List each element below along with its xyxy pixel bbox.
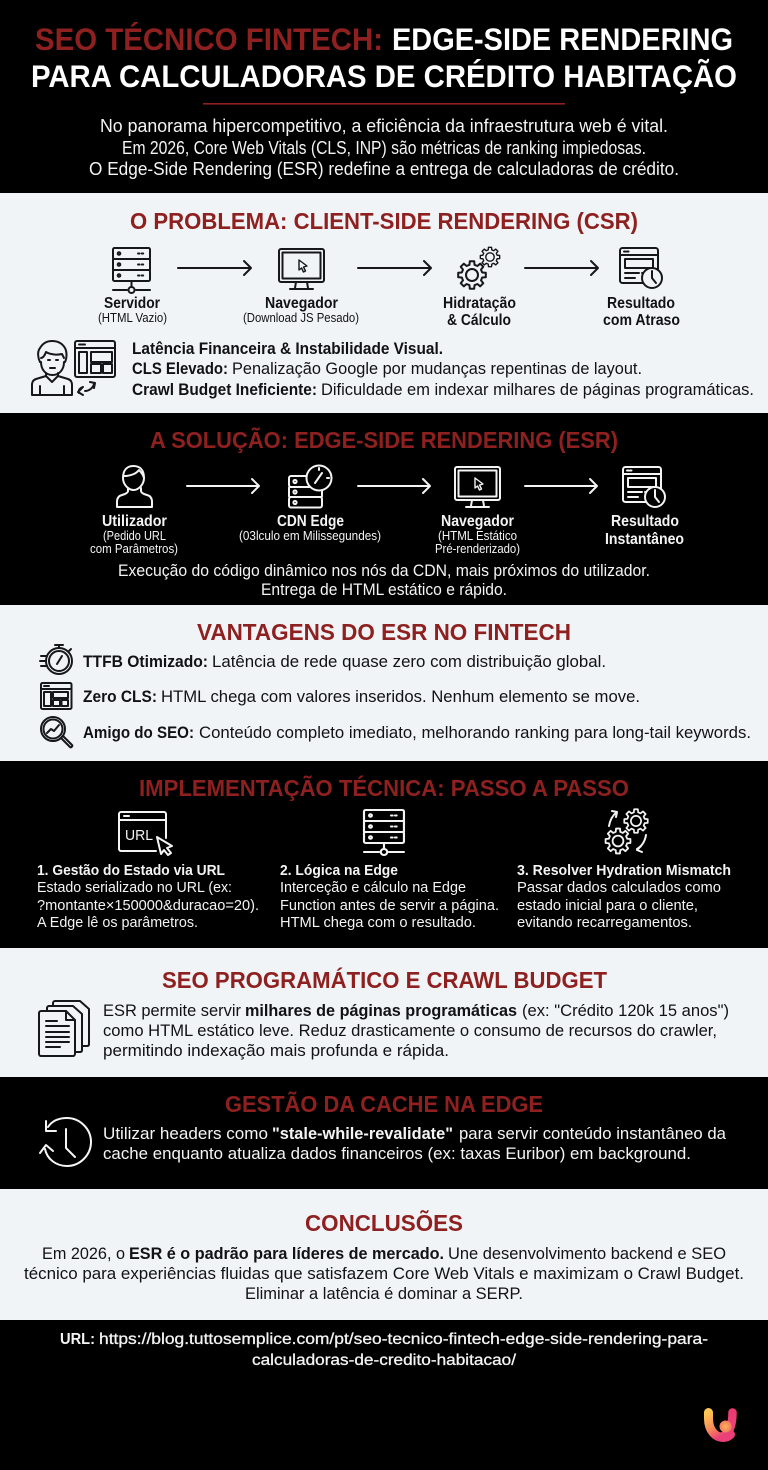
step labels: & Cálculo — [447, 312, 511, 329]
conclusion text: ESR é o padrão para líderes de mercado. — [129, 1244, 444, 1263]
step labels: Navegador — [441, 513, 514, 530]
step labels — [90, 513, 684, 556]
heading: vantagens: VANTAGENS DO ESR NO FINTECH — [197, 619, 571, 645]
step labels: com Parâmetros) — [90, 542, 178, 556]
cache text: cache enquanto atualiza dados financeiros (ex: taxas Euribor) em background. — [103, 1144, 691, 1163]
icon: cronómetro — [40, 645, 72, 674]
seo text: ESR permite servir — [103, 1001, 241, 1020]
icon: resultado — [623, 467, 665, 507]
panel: implementação — [0, 761, 768, 948]
icon: servidor — [364, 810, 404, 855]
cache text: Utilizar headers como — [103, 1124, 268, 1143]
panel: vantagens — [0, 605, 768, 761]
step 2 — [280, 862, 499, 931]
step 3 — [517, 862, 731, 931]
vantagem: zero cls: HTML chega com valores inseridos. Nenhum elemento se move. — [161, 687, 640, 706]
conclusion text: técnico para experiências fluidas que satisfazem Core Web Vitals e maximizam o Crawl Budget. — [24, 1264, 744, 1283]
step labels: Hidratação — [443, 295, 516, 312]
panel: gestão da cache — [0, 1077, 768, 1189]
step 1: ?montante×150000&duracao=20). — [37, 897, 259, 914]
icon: utilizador — [117, 466, 152, 507]
vantagem: ttfb: Latência de rede quase zero com distribuição global. — [212, 652, 606, 671]
problem text: Latência Financeira & Instabilidade Visual. — [132, 339, 443, 358]
step 1: 1. Gestão do Estado via URL — [37, 862, 225, 879]
step labels: Resultado — [611, 513, 679, 530]
icon: engrenagens — [458, 247, 500, 289]
step 3: evitando recarregamentos. — [517, 914, 692, 931]
icon: cdn edge — [289, 466, 332, 508]
step 2: Interceção e cálculo na Edge — [280, 879, 466, 896]
step labels: (HTML Vazio) — [98, 311, 167, 325]
step labels: (03lculo em Milissegundes) — [239, 529, 381, 543]
icon: url — [119, 812, 172, 855]
step 1: Estado serializado no URL (ex: — [37, 879, 232, 896]
panel: seo programático — [0, 948, 768, 1077]
step labels — [98, 295, 680, 329]
title: EDGE-SIDE RENDERING — [392, 21, 733, 57]
problem text: Dificuldade em indexar milhares de páginas programáticas. — [321, 380, 754, 399]
heading: gestão da cache: GESTÃO DA CACHE NA EDGE — [225, 1090, 543, 1117]
panel: conclusões — [0, 1189, 768, 1320]
step labels: Servidor — [104, 295, 160, 312]
arrow — [525, 261, 598, 275]
icon: navegador — [279, 249, 324, 289]
heading: problema: O PROBLEMA: CLIENT-SIDE RENDERING (CSR) — [130, 208, 638, 234]
conclusion text — [24, 1244, 744, 1303]
title: PARA CALCULADORAS DE CRÉDITO HABITAÇÃO — [31, 58, 737, 94]
step 2: HTML chega com o resultado. — [280, 914, 476, 931]
step labels: Instantâneo — [605, 531, 684, 548]
cache text — [103, 1124, 727, 1163]
panel: header — [0, 0, 768, 193]
arrow — [187, 479, 259, 493]
step labels: (Download JS Pesado) — [243, 311, 359, 325]
step 2: 2. Lógica na Edge — [280, 862, 398, 879]
step labels: Navegador — [265, 295, 338, 312]
icon: layout — [41, 683, 72, 709]
icon: lupa — [41, 717, 72, 747]
panel: footer — [0, 1320, 768, 1470]
step labels: (HTML Estático — [438, 529, 517, 543]
panel: a solução — [0, 413, 768, 605]
intro text: No panorama hipercompetitivo, a eficiência da infraestrutura web é vital. — [100, 116, 668, 136]
cache text: para servir conteúdo instantâneo da — [459, 1124, 727, 1143]
footer url: https://blog.tuttosemplice.com/pt/seo-tecnico-fintech-edge-side-rendering-para- — [99, 1331, 708, 1348]
intro text — [89, 116, 679, 179]
step labels: Utilizador — [102, 513, 167, 530]
problem text: Penalização Google por mudanças repentinas de layout. — [232, 359, 642, 378]
step 3: 3. Resolver Hydration Mismatch — [517, 862, 731, 879]
icon: relógio histórico — [40, 1118, 91, 1166]
panel: o problema — [0, 193, 768, 413]
intro text: O Edge-Side Rendering (ESR) redefine a entrega de calculadoras de crédito. — [89, 159, 679, 179]
step 2: Function antes de servir a página. — [280, 897, 499, 914]
arrow — [525, 479, 597, 493]
icon: utilizador e layout — [32, 341, 115, 395]
step labels: Resultado — [607, 295, 675, 312]
seo text: como HTML estático leve. Reduz drasticamente o consumo de recursos do crawler, — [103, 1021, 717, 1040]
arrow — [358, 479, 430, 493]
arrow — [178, 261, 251, 275]
seo text — [103, 1001, 729, 1060]
heading: solução: A SOLUÇÃO: EDGE-SIDE RENDERING (ESR) — [150, 426, 618, 453]
conclusion text: Une desenvolvimento backend e SEO — [448, 1244, 726, 1263]
step labels: (Pedido URL — [103, 529, 166, 543]
footer url — [60, 1331, 708, 1369]
step 1 — [37, 862, 259, 931]
seo text: permitindo indexação mais profunda e rápida. — [103, 1041, 449, 1060]
title: SEO TÉCNICO FINTECH: — [35, 21, 383, 57]
heading: seo programático: SEO PROGRAMÁTICO E CRAWL BUDGET — [162, 966, 608, 993]
footer url: calculadoras-de-credito-habitacao/ — [252, 1352, 517, 1369]
step 3: estado inicial para o cliente, — [517, 897, 698, 914]
vantagem: amigo do seo: Amigo do SEO: — [83, 723, 194, 742]
cache text: "stale-while-revalidate" — [272, 1124, 453, 1143]
problem text: CLS Elevado: — [132, 359, 228, 378]
vantagem: zero cls: Zero CLS: — [83, 687, 157, 706]
step 1: A Edge lê os parâmetros. — [37, 914, 198, 931]
solution text: Execução do código dinâmico nos nós da CDN, mais próximos do utilizador. — [118, 561, 650, 580]
step labels: com Atraso — [603, 312, 680, 329]
step labels: Pré-renderizado) — [435, 542, 520, 556]
icon: documentos — [39, 1001, 89, 1056]
icon: resultado — [620, 248, 662, 288]
seo text: (ex: "Crédito 120k 15 anos") — [522, 1001, 729, 1020]
problem text — [132, 339, 754, 399]
step 3: Passar dados calculados como — [517, 879, 721, 896]
heading: implementação: IMPLEMENTAÇÃO TÉCNICA: PASSO A PASSO — [139, 774, 629, 801]
seo text: milhares de páginas programáticas — [245, 1001, 517, 1020]
solution text: Entrega de HTML estático e rápido. — [261, 580, 507, 599]
step labels: CDN Edge — [277, 513, 344, 530]
icon: url: URL — [125, 827, 153, 844]
conclusion text: Eliminar a latência é dominar a SERP. — [245, 1284, 523, 1303]
arrow — [358, 261, 431, 275]
footer url: URL: — [60, 1331, 95, 1348]
title — [31, 21, 737, 94]
icon: logo — [708, 1412, 732, 1438]
vantagem: ttfb: TTFB Otimizado: — [83, 652, 208, 671]
heading: conclusões: CONCLUSÕES — [305, 1209, 463, 1236]
conclusion text: Em 2026, o — [42, 1244, 125, 1263]
icon: servidor — [113, 248, 150, 293]
icon: engrenagens com setas — [606, 809, 648, 853]
icon: navegador — [455, 467, 500, 507]
intro text: Em 2026, Core Web Vitals (CLS, INP) são métricas de ranking impiedosas. — [122, 138, 646, 158]
solution text — [118, 561, 650, 599]
vantagem: amigo do seo: Conteúdo completo imediato, melhorando ranking para long-tail keywords. — [199, 723, 751, 742]
problem text: Crawl Budget Ineficiente: — [132, 380, 317, 399]
